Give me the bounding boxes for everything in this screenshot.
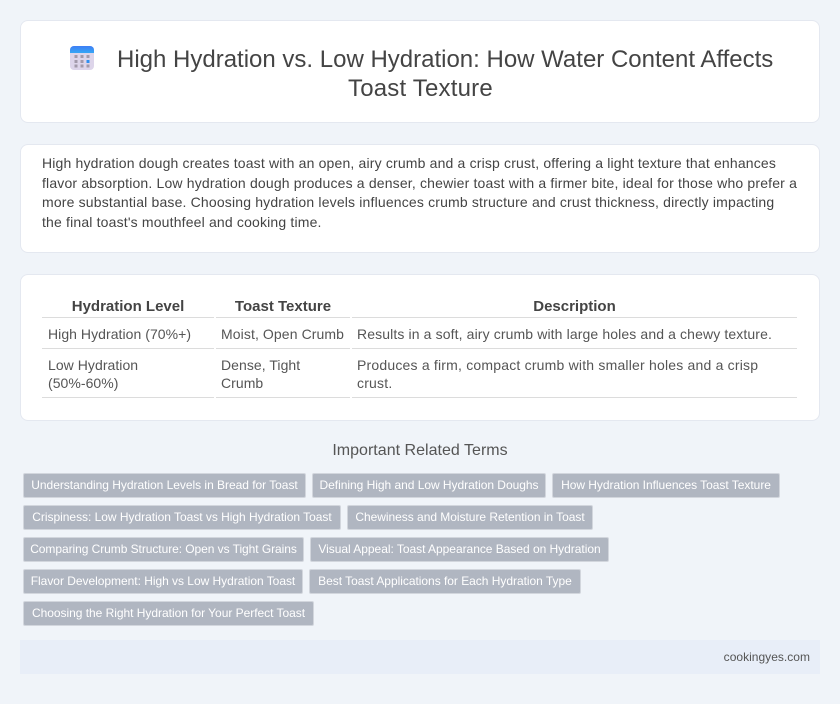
row: high hydration xyxy=(48,326,772,342)
footer xyxy=(20,640,820,674)
tag xyxy=(23,601,314,626)
row: low hydration: (50%-60%) xyxy=(48,375,118,391)
row: low hydration xyxy=(48,357,758,391)
icon: calendar xyxy=(70,46,94,70)
row: high hydration: High Hydration (70%+) xyxy=(48,326,191,342)
tag xyxy=(552,473,780,498)
tag xyxy=(310,537,609,562)
column heading: description: Description xyxy=(533,298,616,315)
row: high hydration: Results in a soft, airy crumb with large holes and a chewy texture. xyxy=(357,326,772,342)
text block: description: the final toast's mouthfeel and cooking time. xyxy=(42,214,322,230)
tag: Crispiness: Low Hydration Toast vs High Hydration Toast xyxy=(32,510,332,524)
column heading: toast texture: Toast Texture xyxy=(235,298,331,315)
panel: header xyxy=(20,20,820,123)
text block: description: High hydration dough creates toast with an open, airy crumb and a crisp crust, offering a light texture that enhances xyxy=(42,155,776,171)
footer source text: cookingyes.com xyxy=(724,650,810,664)
text block: description: flavor absorption. Low hydration dough produces a denser, chewier toast with a firmer bite, ideal for those who prefer a xyxy=(42,174,797,190)
text block: description xyxy=(42,155,797,230)
tag: Comparing Crumb Structure: Open vs Tight Grains xyxy=(30,542,297,556)
tag xyxy=(23,505,341,530)
row: high hydration: Moist, Open Crumb xyxy=(221,326,344,342)
title: Toast Texture xyxy=(348,75,493,102)
tag: How Hydration Influences Toast Texture xyxy=(561,478,771,492)
column heading: hydration level: Hydration Level xyxy=(72,298,184,315)
tag xyxy=(23,537,304,562)
table xyxy=(42,298,797,398)
tag: Best Toast Applications for Each Hydration Type xyxy=(318,574,572,588)
row: low hydration: Dense, Tight xyxy=(221,357,300,373)
heading: related terms: Important Related Terms xyxy=(332,442,508,459)
tag list xyxy=(23,473,780,626)
tag xyxy=(309,569,581,594)
tag: Flavor Development: High vs Low Hydration Toast xyxy=(31,574,295,588)
row: low hydration: Crumb xyxy=(221,375,263,391)
row: low hydration: Produces a firm, compact crumb with smaller holes and a crisp xyxy=(357,357,758,373)
tag: Visual Appeal: Toast Appearance Based on Hydration xyxy=(318,542,601,556)
tag xyxy=(312,473,546,498)
text block: description: more substantial base. Choosing hydration levels influences crumb structure and crust thickness, directly impacting xyxy=(42,194,774,210)
tag: Understanding Hydration Levels in Bread for Toast xyxy=(31,478,298,492)
title: High Hydration vs. Low Hydration: How Water Content Affects xyxy=(117,46,773,73)
row: low hydration: crust. xyxy=(357,375,392,391)
row: low hydration: Low Hydration xyxy=(48,357,138,373)
panel: description xyxy=(20,144,820,253)
tag xyxy=(23,473,306,498)
tag: Choosing the Right Hydration for Your Perfect Toast xyxy=(32,606,305,620)
panel: comparison table xyxy=(20,274,820,421)
tag: Chewiness and Moisture Retention in Toast xyxy=(355,510,585,524)
title xyxy=(117,46,773,102)
tag xyxy=(347,505,593,530)
tag xyxy=(23,569,303,594)
tag: Defining High and Low Hydration Doughs xyxy=(320,478,538,492)
